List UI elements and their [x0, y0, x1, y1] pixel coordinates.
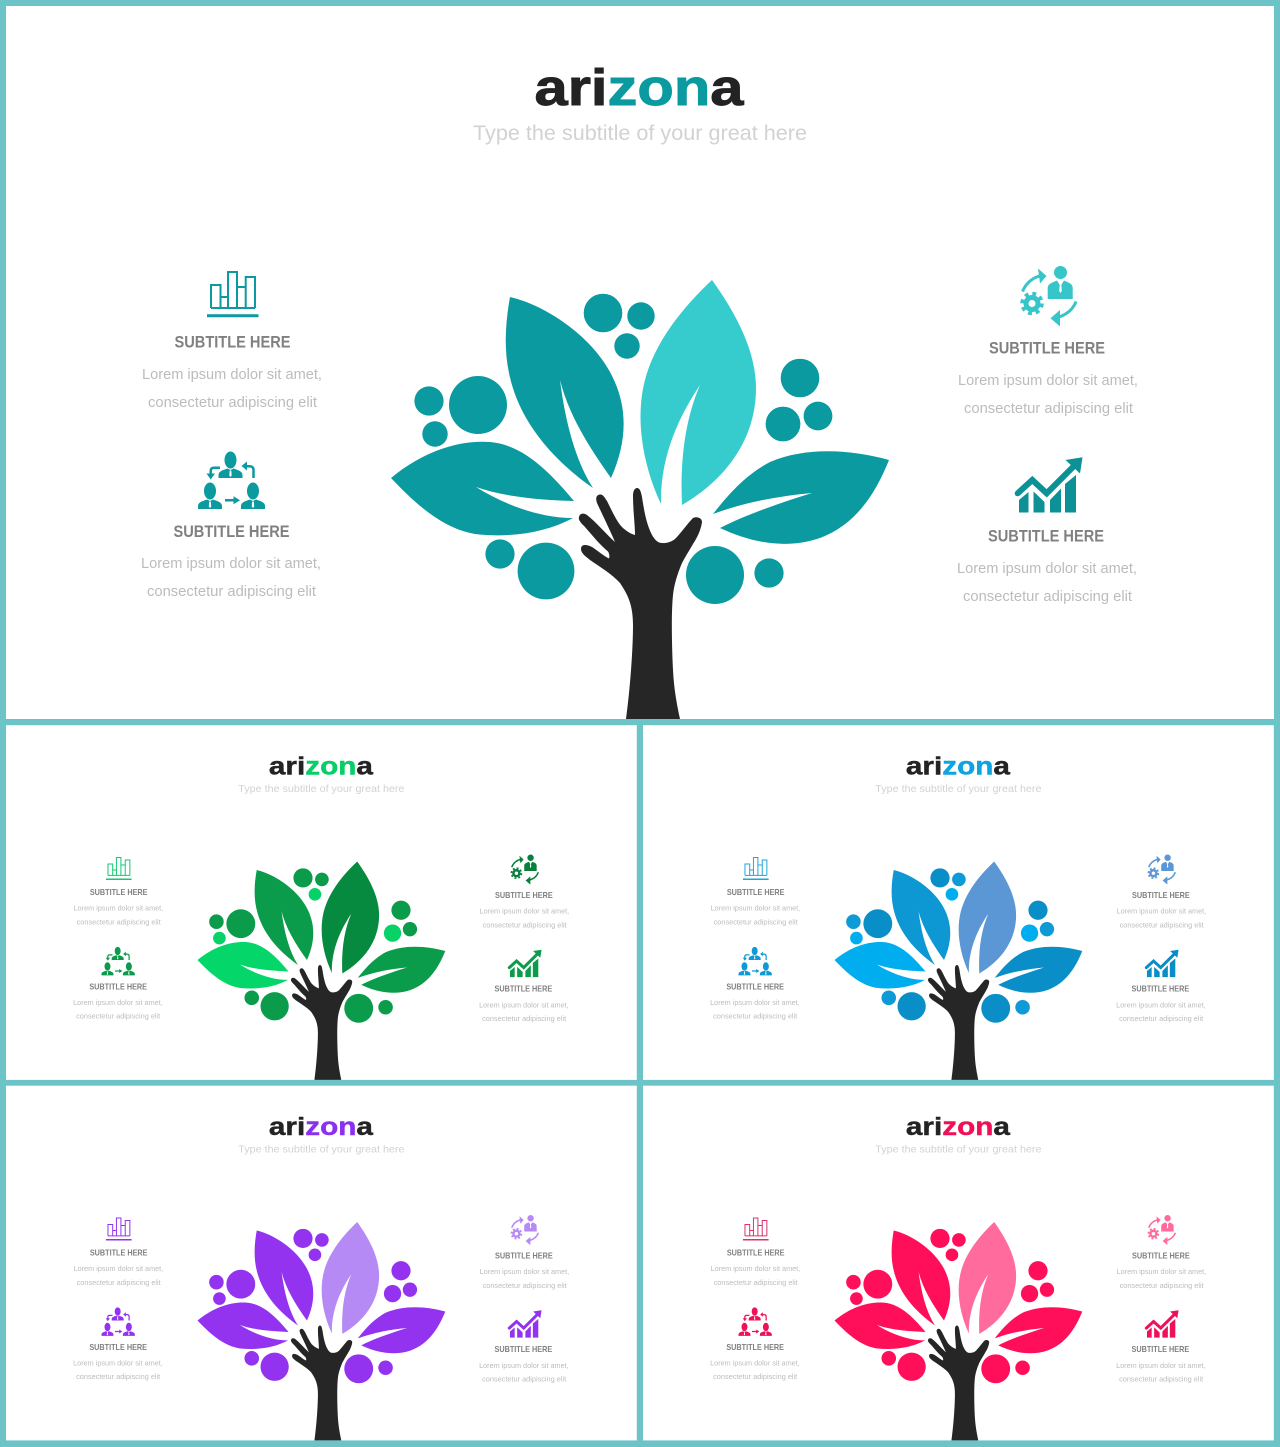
- leaf: top right: [959, 1222, 1016, 1334]
- circles: bottom left: [244, 1351, 289, 1381]
- heading: left top: SUBTITLE HERE: [174, 332, 290, 352]
- heading: right bottom: SUBTITLE HERE: [1132, 984, 1190, 994]
- circles: bottom right: [686, 546, 784, 604]
- hand trunk: [579, 488, 702, 719]
- icon: gear and person: [1022, 266, 1076, 326]
- heading: right bottom: SUBTITLE HERE: [988, 526, 1104, 546]
- circles: left: [846, 1270, 892, 1305]
- icon: bar chart: [743, 858, 769, 879]
- leaf: right: [995, 947, 1082, 993]
- icon: gear and person: [1148, 1215, 1175, 1245]
- circles: top: [930, 868, 966, 901]
- text block: right top: Lorem ipsum dolor sit amet,: [958, 372, 1138, 389]
- text block: left bottom: Lorem ipsum dolor sit amet,: [710, 998, 800, 1007]
- text block: right top: consectetur adipiscing elit: [1120, 921, 1205, 930]
- icon: growth chart: [509, 950, 542, 977]
- heading: right top: SUBTITLE HERE: [989, 338, 1105, 358]
- text block: right bottom: [1116, 1361, 1206, 1384]
- icon: team cycle: [102, 947, 135, 975]
- text block: right top: consectetur adipiscing elit: [483, 921, 568, 930]
- text block: right bottom: [957, 560, 1137, 605]
- icon: gear and person: [511, 855, 538, 885]
- tree illustration: [391, 280, 889, 719]
- leaf: top right: [322, 1222, 379, 1334]
- icon: bar chart: [106, 858, 132, 879]
- heading: left top: SUBTITLE HERE: [90, 887, 148, 897]
- title: arizona: [269, 752, 374, 780]
- icon: growth chart: [1146, 1310, 1179, 1338]
- icon: gear and person: [511, 1215, 538, 1245]
- icon: growth chart: [509, 1310, 542, 1338]
- text block: left bottom: [141, 555, 321, 600]
- heading: right top: SUBTITLE HERE: [495, 1251, 553, 1261]
- text block: left bottom: Lorem ipsum dolor sit amet,: [710, 1358, 800, 1367]
- title: arizona: [269, 1113, 374, 1141]
- panel: blue slide: [643, 725, 1274, 1080]
- circles: bottom left: [881, 1351, 926, 1381]
- leaf: left: [835, 942, 926, 989]
- circles: bottom right: [344, 994, 393, 1023]
- text block: left top: consectetur adipiscing elit: [714, 1278, 799, 1287]
- text block: left top: [74, 904, 163, 927]
- subtitle: Type the subtitle of your great here: [473, 122, 807, 145]
- text block: left top: [74, 1264, 163, 1287]
- icon: growth chart: [1146, 950, 1179, 977]
- circles: left: [846, 909, 892, 944]
- text block: right bottom: consectetur adipiscing elit: [1119, 1014, 1204, 1023]
- heading: left top: SUBTITLE HERE: [727, 887, 785, 897]
- heading: left bottom: SUBTITLE HERE: [89, 981, 147, 991]
- panel: green slide: [6, 725, 637, 1080]
- circles: right: [384, 1261, 417, 1302]
- title: arizon a: [534, 59, 744, 116]
- text block: left bottom: [710, 998, 800, 1021]
- title: arizona: [906, 1113, 1011, 1141]
- text block: right top: consectetur adipiscing elit: [483, 1281, 568, 1290]
- leaf: top left: [892, 870, 950, 965]
- text block: right top: consectetur adipiscing elit: [964, 400, 1134, 417]
- text block: right bottom: Lorem ipsum dolor sit amet,: [957, 560, 1137, 577]
- text block: right top: [1117, 907, 1206, 930]
- text block: left top: Lorem ipsum dolor sit amet,: [74, 904, 163, 913]
- text block: right top: [958, 372, 1138, 417]
- panel: purple slide: [6, 1086, 637, 1440]
- leaf: top right: [641, 280, 756, 505]
- subtitle: Type the subtitle of your great here: [875, 784, 1042, 795]
- text block: right bottom: consectetur adipiscing elit: [963, 588, 1133, 605]
- heading: right top: SUBTITLE HERE: [1132, 1251, 1190, 1261]
- text block: left bottom: consectetur adipiscing elit: [76, 1012, 161, 1021]
- circles: bottom right: [981, 994, 1030, 1023]
- heading: right top: SUBTITLE HERE: [1132, 890, 1190, 900]
- circles: bottom right: [344, 1354, 393, 1383]
- circles: right: [1021, 901, 1054, 942]
- panel: teal slide: [6, 6, 1274, 719]
- hand trunk: [928, 1325, 989, 1440]
- subtitle: Type the subtitle of your great here: [238, 1144, 405, 1155]
- hand trunk: [291, 965, 352, 1080]
- leaf: top left: [506, 297, 624, 488]
- title: arizona: [906, 752, 1011, 780]
- heading: left bottom: SUBTITLE HERE: [726, 1342, 784, 1352]
- text block: right bottom: [479, 1000, 569, 1023]
- circles: left: [414, 376, 507, 447]
- leaf: left: [835, 1302, 926, 1349]
- circles: bottom right: [981, 1354, 1030, 1383]
- leaf: right: [358, 947, 445, 993]
- leaf: left: [198, 942, 289, 989]
- text block: right top: [480, 907, 569, 930]
- circles: left: [209, 909, 255, 944]
- circles: right: [384, 901, 417, 942]
- icon: growth chart: [1018, 457, 1082, 512]
- leaf: right: [713, 451, 889, 544]
- subtitle: Type the subtitle of your great here: [238, 784, 405, 795]
- tree illustration: [198, 862, 445, 1080]
- circles: left: [209, 1270, 255, 1305]
- icon: team cycle: [102, 1307, 135, 1336]
- text block: left top: Lorem ipsum dolor sit amet,: [74, 1264, 163, 1273]
- text block: right bottom: Lorem ipsum dolor sit amet,: [479, 1000, 569, 1009]
- hand trunk: [291, 1325, 352, 1440]
- text block: left top: Lorem ipsum dolor sit amet,: [142, 366, 322, 383]
- icon: bar chart: [207, 272, 258, 316]
- text block: left bottom: Lorem ipsum dolor sit amet,: [73, 998, 163, 1007]
- text block: right bottom: consectetur adipiscing elit: [482, 1375, 567, 1384]
- text block: left top: [711, 1264, 800, 1287]
- text block: left top: [142, 366, 322, 411]
- icon: gear and person: [1148, 855, 1175, 885]
- text block: right bottom: [479, 1361, 569, 1384]
- text block: left top: consectetur adipiscing elit: [714, 918, 799, 927]
- tree illustration: [835, 862, 1082, 1080]
- leaf: top left: [892, 1230, 950, 1325]
- heading: left top: SUBTITLE HERE: [90, 1248, 148, 1258]
- heading: right bottom: SUBTITLE HERE: [495, 984, 553, 994]
- text block: left bottom: consectetur adipiscing elit: [147, 583, 317, 600]
- circles: bottom left: [485, 539, 574, 599]
- text block: right top: Lorem ipsum dolor sit amet,: [1117, 1267, 1206, 1276]
- text block: right bottom: [1116, 1000, 1206, 1023]
- text block: right top: consectetur adipiscing elit: [1120, 1281, 1205, 1290]
- text block: right top: Lorem ipsum dolor sit amet,: [480, 907, 569, 916]
- text block: left bottom: Lorem ipsum dolor sit amet,: [141, 555, 321, 572]
- text block: right bottom: Lorem ipsum dolor sit amet,: [1116, 1000, 1206, 1009]
- text block: left bottom: Lorem ipsum dolor sit amet,: [73, 1358, 163, 1367]
- circles: top: [293, 1229, 329, 1261]
- leaf: left: [198, 1302, 289, 1349]
- text block: right bottom: Lorem ipsum dolor sit amet,: [1116, 1361, 1206, 1370]
- heading: left bottom: SUBTITLE HERE: [89, 1342, 147, 1352]
- icon: team cycle: [198, 452, 265, 509]
- leaf: top right: [959, 862, 1016, 973]
- icon: team cycle: [739, 1307, 772, 1336]
- icon: team cycle: [739, 947, 772, 975]
- text block: left top: consectetur adipiscing elit: [77, 1278, 162, 1287]
- circles: top: [584, 294, 655, 359]
- circles: right: [766, 359, 832, 441]
- heading: left top: SUBTITLE HERE: [727, 1248, 785, 1258]
- heading: right top: SUBTITLE HERE: [495, 890, 553, 900]
- text block: left bottom: consectetur adipiscing elit: [76, 1372, 161, 1381]
- tree illustration: [198, 1222, 445, 1440]
- leaf: top right: [322, 862, 379, 973]
- circles: bottom left: [881, 991, 926, 1020]
- text block: left top: consectetur adipiscing elit: [77, 918, 162, 927]
- text block: left top: [711, 904, 800, 927]
- circles: bottom left: [244, 991, 289, 1020]
- text block: right bottom: consectetur adipiscing elit: [482, 1014, 567, 1023]
- text block: right top: Lorem ipsum dolor sit amet,: [1117, 907, 1206, 916]
- text block: right top: [1117, 1267, 1206, 1290]
- text block: right bottom: Lorem ipsum dolor sit amet,: [479, 1361, 569, 1370]
- text block: left bottom: [73, 1358, 163, 1381]
- leaf: right: [358, 1307, 445, 1353]
- circles: top: [293, 868, 329, 901]
- leaf: top left: [255, 870, 313, 965]
- heading: left bottom: SUBTITLE HERE: [174, 522, 290, 541]
- circles: right: [1021, 1261, 1054, 1302]
- heading: right bottom: SUBTITLE HERE: [495, 1344, 553, 1354]
- text block: left bottom: [710, 1358, 800, 1381]
- circles: top: [930, 1229, 966, 1261]
- hand trunk: [928, 965, 989, 1080]
- text block: left top: consectetur adipiscing elit: [148, 394, 318, 411]
- text block: right top: Lorem ipsum dolor sit amet,: [480, 1267, 569, 1276]
- heading: left bottom: SUBTITLE HERE: [726, 981, 784, 991]
- text block: left bottom: [73, 998, 163, 1021]
- text block: left bottom: consectetur adipiscing elit: [713, 1012, 798, 1021]
- text block: left top: Lorem ipsum dolor sit amet,: [711, 904, 800, 913]
- icon: bar chart: [743, 1218, 769, 1240]
- text block: right bottom: consectetur adipiscing elit: [1119, 1375, 1204, 1384]
- leaf: top left: [255, 1230, 313, 1325]
- text block: right top: [480, 1267, 569, 1290]
- leaf: right: [995, 1307, 1082, 1353]
- icon: bar chart: [106, 1218, 132, 1240]
- panel: pink slide: [643, 1086, 1274, 1440]
- text block: left top: Lorem ipsum dolor sit amet,: [711, 1264, 800, 1273]
- subtitle: Type the subtitle of your great here: [875, 1144, 1042, 1155]
- tree illustration: [835, 1222, 1082, 1440]
- heading: right bottom: SUBTITLE HERE: [1132, 1344, 1190, 1354]
- text block: left bottom: consectetur adipiscing elit: [713, 1372, 798, 1381]
- leaf: left: [391, 442, 574, 535]
